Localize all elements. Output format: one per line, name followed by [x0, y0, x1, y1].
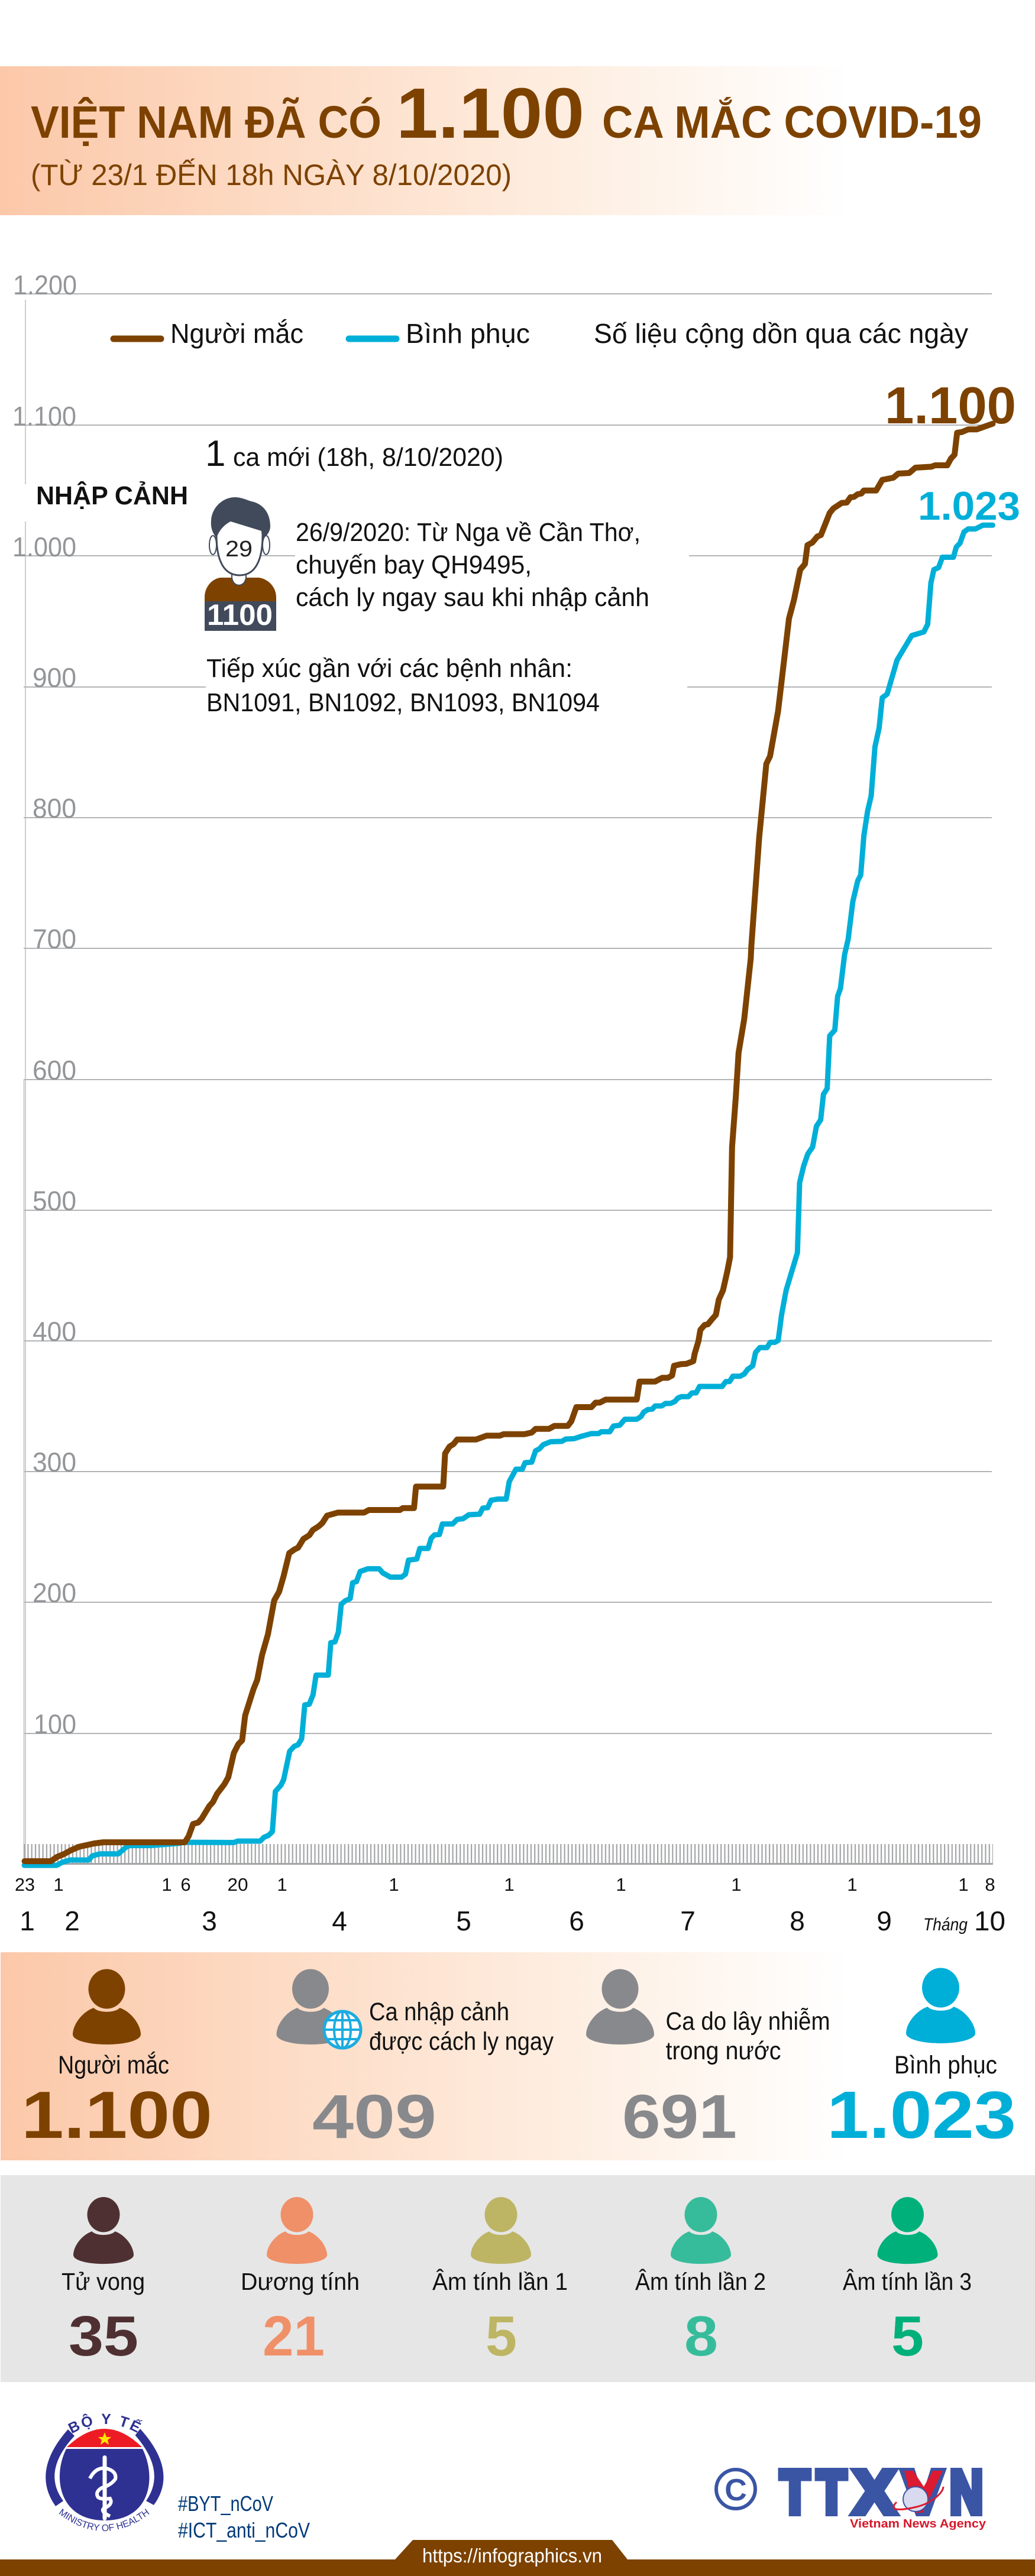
new case text: ca mới (18h, 8/10/2020) — [233, 443, 503, 472]
x axis month labels: 8 — [790, 1906, 805, 1936]
patient contacts: Tiếp xúc gần với các bệnh nhân: — [206, 654, 573, 683]
month axis caption: Tháng — [923, 1915, 968, 1935]
icon: patient: 29 — [225, 537, 253, 562]
new case count: 1 — [205, 433, 225, 474]
x axis day labels: 1 — [847, 1874, 858, 1895]
x axis day labels — [15, 1874, 995, 1895]
stat: cases — [21, 1969, 212, 2152]
stat: imported — [277, 1969, 554, 2151]
x axis month labels: 7 — [680, 1906, 696, 1936]
x axis day labels: 23 — [15, 1874, 35, 1895]
y axis labels: 1.000 — [12, 532, 76, 562]
icon: person grey — [277, 1969, 344, 2044]
icon: patient — [205, 497, 276, 631]
copyright mark — [716, 2470, 755, 2509]
logo: ministry of health: MINISTRY OF HEALTH — [59, 2509, 149, 2532]
end label: recovered: 1.023 — [918, 484, 1020, 529]
patient travel details: 26/9/2020: Từ Nga về Cần Thơ, — [296, 518, 641, 547]
x axis day labels: 1 — [161, 1874, 172, 1895]
icon: person green — [877, 2197, 938, 2264]
panel: title banner — [0, 66, 1035, 215]
stat: negative three times: Âm tính lần 3 — [843, 2268, 972, 2295]
icon: person dark — [73, 2197, 134, 2264]
agency tagline: Vietnam News Agency — [850, 2517, 987, 2530]
panel: patient status — [1, 2175, 1035, 2382]
agency wordmark: N — [950, 2458, 983, 2526]
y axis labels: 1.200 — [13, 270, 77, 300]
icon: person olive — [471, 2197, 531, 2264]
y axis labels: 300 — [33, 1447, 76, 1477]
stat: negative twice — [635, 2197, 766, 2368]
stat: negative once: 5 — [486, 2305, 517, 2368]
footer url: https://infographics.vn — [422, 2545, 602, 2567]
stat: imported: 409 — [312, 2082, 436, 2151]
category heading: NHẬP CẢNH — [36, 481, 188, 510]
legend label: recovered: Bình phục — [406, 318, 530, 349]
x axis month labels: 5 — [456, 1906, 471, 1936]
icon: patient: 1100 — [207, 598, 273, 631]
x axis month labels: 1 — [20, 1906, 35, 1936]
stat: domestic: Ca do lây nhiễm — [666, 2007, 830, 2036]
stat: negative three times — [843, 2197, 972, 2368]
x axis day labels: 1 — [504, 1874, 515, 1895]
x axis day labels: 1 — [616, 1874, 626, 1895]
stat: negative twice: 8 — [684, 2305, 718, 2368]
agency wordmark: V — [903, 2458, 943, 2526]
x axis month labels: 3 — [202, 1906, 217, 1936]
subtitle: (TỪ 23/1 ĐẾN 18h NGÀY 8/10/2020) — [31, 158, 512, 192]
panel: main statistics — [1, 1952, 1035, 2160]
title — [31, 73, 982, 153]
copyright mark: C — [724, 2473, 747, 2507]
stat: deaths — [62, 2197, 145, 2368]
stat: imported: Ca nhập cảnh — [369, 1998, 509, 2026]
patient contacts — [206, 654, 600, 717]
x axis day labels: 1 — [277, 1874, 287, 1895]
recovered line — [24, 525, 992, 1865]
y axis labels: 800 — [33, 793, 76, 824]
hashtags: #ICT_anti_nCoV — [178, 2518, 310, 2542]
icon: person teal — [671, 2197, 731, 2264]
x axis day labels: 1 — [389, 1874, 399, 1895]
y axis labels: 500 — [33, 1185, 76, 1216]
icon: person blue — [906, 1968, 975, 2043]
patient travel details: cách ly ngay sau khi nhập cảnh — [296, 583, 649, 612]
y axis labels: 1.100 — [12, 401, 76, 432]
x axis day ticks — [24, 1844, 993, 1865]
y axis labels: 400 — [33, 1316, 76, 1347]
logo: ministry of health — [46, 2413, 163, 2532]
legend swatch: cases — [114, 336, 161, 342]
stat: deaths: 35 — [69, 2305, 138, 2368]
x axis month labels: 2 — [64, 1906, 80, 1936]
stat: domestic: trong nước — [666, 2037, 781, 2065]
hashtags: #BYT_nCoV — [178, 2491, 273, 2516]
y axis labels: 200 — [33, 1577, 76, 1608]
y axis labels: 700 — [33, 924, 76, 954]
y axis labels: 600 — [33, 1055, 76, 1086]
x axis day labels: 20 — [227, 1874, 248, 1895]
cases line — [25, 424, 992, 1861]
patient travel details — [296, 518, 649, 612]
x axis day labels: 6 — [180, 1874, 191, 1895]
callout: new case — [36, 433, 649, 717]
y axis labels: 900 — [33, 662, 76, 693]
chart gridlines — [24, 294, 992, 1864]
stat: recovered — [827, 1968, 1016, 2152]
agency wordmark — [780, 2458, 983, 2526]
stat: recovered: 1.023 — [827, 2078, 1016, 2152]
title: VIỆT NAM ĐÃ CÓ — [31, 96, 381, 148]
x axis day labels: 1 — [958, 1874, 969, 1895]
patient travel details: chuyến bay QH9495, — [296, 550, 532, 579]
icon: person brown — [73, 1969, 141, 2044]
title: 1.100 — [396, 73, 584, 153]
stat: positive: 21 — [263, 2305, 325, 2368]
agency wordmark: X — [853, 2458, 895, 2526]
x axis month labels: 10 — [974, 1906, 1005, 1936]
legend swatch: recovered — [349, 336, 396, 342]
stat: recovered: Bình phục — [894, 2051, 997, 2079]
y axis labels — [12, 270, 77, 1739]
patient contacts: BN1091, BN1092, BN1093, BN1094 — [206, 688, 600, 717]
legend — [114, 318, 968, 349]
footer bar — [0, 2540, 1035, 2576]
icon: globe — [324, 2011, 361, 2048]
stat: positive: Dương tính — [241, 2268, 360, 2295]
stat: cases: 1.100 — [21, 2078, 212, 2152]
stat: negative once: Âm tính lần 1 — [432, 2268, 568, 2295]
icon: person grey — [586, 1969, 654, 2044]
y axis labels: 100 — [34, 1709, 76, 1739]
end label: cases: 1.100 — [885, 376, 1016, 435]
agency wordmark: T — [817, 2458, 846, 2526]
stat: negative three times: 5 — [891, 2305, 924, 2368]
agency wordmark: T — [780, 2458, 810, 2526]
legend note: Số liệu cộng dồn qua các ngày — [594, 318, 968, 349]
stat: negative once — [432, 2197, 568, 2368]
logo: TTXVN — [716, 2458, 987, 2530]
hashtags — [178, 2491, 310, 2542]
x axis day labels: 1 — [53, 1874, 64, 1895]
x axis day labels: 1 — [731, 1874, 742, 1895]
chart: cumulative cases line chart — [12, 270, 1020, 1936]
stat: positive — [241, 2197, 360, 2368]
x axis month labels: 4 — [332, 1906, 347, 1936]
legend label: cases: Người mắc — [170, 318, 303, 349]
x axis month labels — [20, 1906, 1005, 1936]
stat: cases: Người mắc — [58, 2051, 169, 2079]
x axis day labels: 8 — [985, 1874, 995, 1895]
title: CA MẮC COVID-19 — [602, 96, 982, 148]
stat: domestic — [586, 1969, 830, 2151]
x axis month labels: 9 — [876, 1906, 892, 1936]
x axis month labels: 6 — [569, 1906, 584, 1936]
stat: domestic: 691 — [622, 2082, 737, 2151]
icon: person orange — [267, 2197, 327, 2264]
stat: deaths: Tử vong — [62, 2268, 145, 2295]
stat: negative twice: Âm tính lần 2 — [635, 2268, 766, 2295]
stat: imported: được cách ly ngay — [369, 2027, 554, 2056]
logo: ministry of health: BỘ Y TẾ — [67, 2413, 143, 2434]
